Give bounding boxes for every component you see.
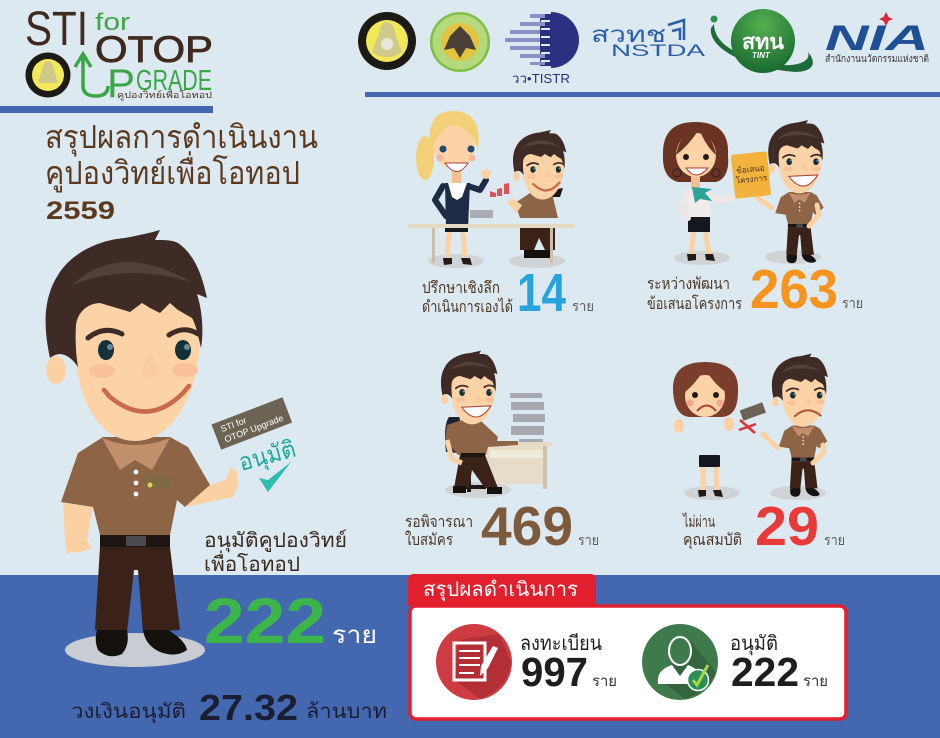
panel: developing proposal: ข้อเสนอโครงการ bbox=[647, 294, 742, 313]
character: main man with approval bbox=[46, 230, 238, 667]
shirt mini logo bbox=[146, 476, 171, 488]
panel: in-depth consulting: ดำเนินการเองได้ bbox=[422, 297, 513, 316]
logo: NSTDA: NSTDA bbox=[611, 41, 706, 60]
budget line: ล้านบาท bbox=[306, 701, 387, 723]
panel: developing proposal: ราย bbox=[842, 295, 863, 311]
budget line: 27.32 bbox=[199, 687, 298, 728]
logo: STI for OTOP Upgrade bbox=[25, 3, 213, 106]
approved count block bbox=[204, 529, 377, 657]
approved count: ราย bbox=[803, 673, 828, 690]
logo: STI for OTOP Upgrade: P bbox=[107, 62, 135, 106]
panel: developing proposal: 263 bbox=[750, 258, 838, 320]
blue footer band bbox=[0, 575, 940, 738]
panel: in-depth consulting: 14 bbox=[517, 263, 566, 323]
logo: STI for OTOP Upgrade: for bbox=[95, 9, 130, 36]
title: คูปองวิทย์เพื่อโอทอป bbox=[45, 151, 300, 193]
illustration: woman handing proposal to man: ข้อเสนอ bbox=[736, 164, 765, 175]
panel: developing proposal: ระหว่างพัฒนา bbox=[647, 276, 730, 293]
card: STI for OTOP Upgrade approved: อนุมัติ bbox=[236, 436, 299, 478]
approved count: อนุมัติ bbox=[730, 633, 778, 656]
card: STI for OTOP Upgrade approved: OTOP Upgrade bbox=[223, 413, 285, 444]
logo: NSTDA: สวทช bbox=[591, 22, 666, 47]
illustration: consultant and man at table bbox=[408, 111, 575, 268]
panel: not qualified: คุณสมบัติ bbox=[683, 532, 742, 550]
approved count: 222 bbox=[731, 649, 799, 695]
title: สรุปผลการดำเนินงาน bbox=[45, 119, 318, 157]
panel: results summary bbox=[408, 574, 846, 719]
tab heading bbox=[408, 574, 596, 606]
illustration: woman handing proposal to man: โครงการ bbox=[735, 172, 768, 186]
sponsor logos row bbox=[358, 9, 929, 86]
illustration: sad woman and man rejected bbox=[673, 353, 828, 500]
logo: department of science service bbox=[430, 12, 490, 72]
budget line: วงเงินอนุมัติ bbox=[71, 701, 186, 724]
divider: right header rule bbox=[365, 92, 940, 97]
logo: TISTR bbox=[505, 12, 579, 86]
logo: TINT: สทน bbox=[742, 31, 785, 54]
logo: NIA: NIA bbox=[825, 19, 929, 58]
title: 2559 bbox=[46, 197, 115, 225]
logo: NIA bbox=[825, 12, 929, 65]
panel: not qualified: 29 bbox=[755, 495, 819, 557]
registered count: ราย bbox=[592, 673, 617, 690]
panel: pending application review bbox=[405, 350, 599, 557]
logo: TINT bbox=[710, 9, 813, 73]
icon: registration form and pen bbox=[436, 624, 512, 700]
budget line bbox=[71, 687, 387, 728]
panel: not qualified: ราย bbox=[824, 532, 845, 548]
tab heading: สรุปผลดำเนินการ bbox=[423, 579, 578, 602]
panel: pending application review: รอพิจารณา bbox=[405, 514, 473, 531]
panel: in-depth consulting: ราย bbox=[572, 298, 594, 314]
logo: STI for OTOP Upgrade: คูปองวิทย์เพื่อโอทอป bbox=[117, 88, 212, 101]
registered count: 997 bbox=[521, 649, 588, 695]
panel: not qualified bbox=[673, 353, 845, 557]
divider: left header rule bbox=[0, 106, 213, 113]
panel: pending application review: ราย bbox=[578, 532, 599, 548]
approved count block: เพื่อโอทอป bbox=[204, 550, 300, 576]
registered count bbox=[520, 633, 617, 695]
logo: TINT: TINT bbox=[752, 51, 771, 60]
approved count block: อนุมัติคูปองวิทย์ bbox=[204, 529, 347, 553]
logo: STI for OTOP Upgrade: STI bbox=[25, 3, 88, 56]
card: STI for OTOP Upgrade approved: STI for bbox=[219, 415, 248, 434]
panel: pending application review: 469 bbox=[481, 495, 573, 557]
panel: in-depth consulting bbox=[408, 111, 594, 323]
panel: developing proposal bbox=[647, 120, 863, 320]
panel: in-depth consulting: ปรึกษาเชิงลึก bbox=[422, 280, 500, 297]
panel: pending application review: ใบสมัคร bbox=[405, 530, 453, 549]
logo: STI for OTOP Upgrade: GRADE bbox=[136, 65, 212, 97]
illustration: man at desk with paper stacks bbox=[441, 350, 552, 498]
icon: approved person with check bbox=[642, 624, 718, 700]
approved count block: 222 bbox=[204, 585, 326, 657]
panel: not qualified: ไม่ผ่าน bbox=[682, 512, 715, 531]
approved count block: ราย bbox=[332, 622, 377, 649]
card: STI for OTOP Upgrade approved bbox=[212, 397, 299, 492]
logo: STI for OTOP Upgrade: OTOP bbox=[95, 29, 213, 70]
illustration: woman handing proposal to man bbox=[663, 120, 824, 265]
approved count bbox=[730, 633, 828, 695]
registered count: ลงทะเบียน bbox=[520, 633, 602, 655]
logo: TISTR: วว•TISTR bbox=[512, 71, 570, 86]
logo: science ministry seal bbox=[358, 12, 416, 70]
logo: NSTDA bbox=[591, 20, 706, 60]
title bbox=[45, 119, 318, 225]
